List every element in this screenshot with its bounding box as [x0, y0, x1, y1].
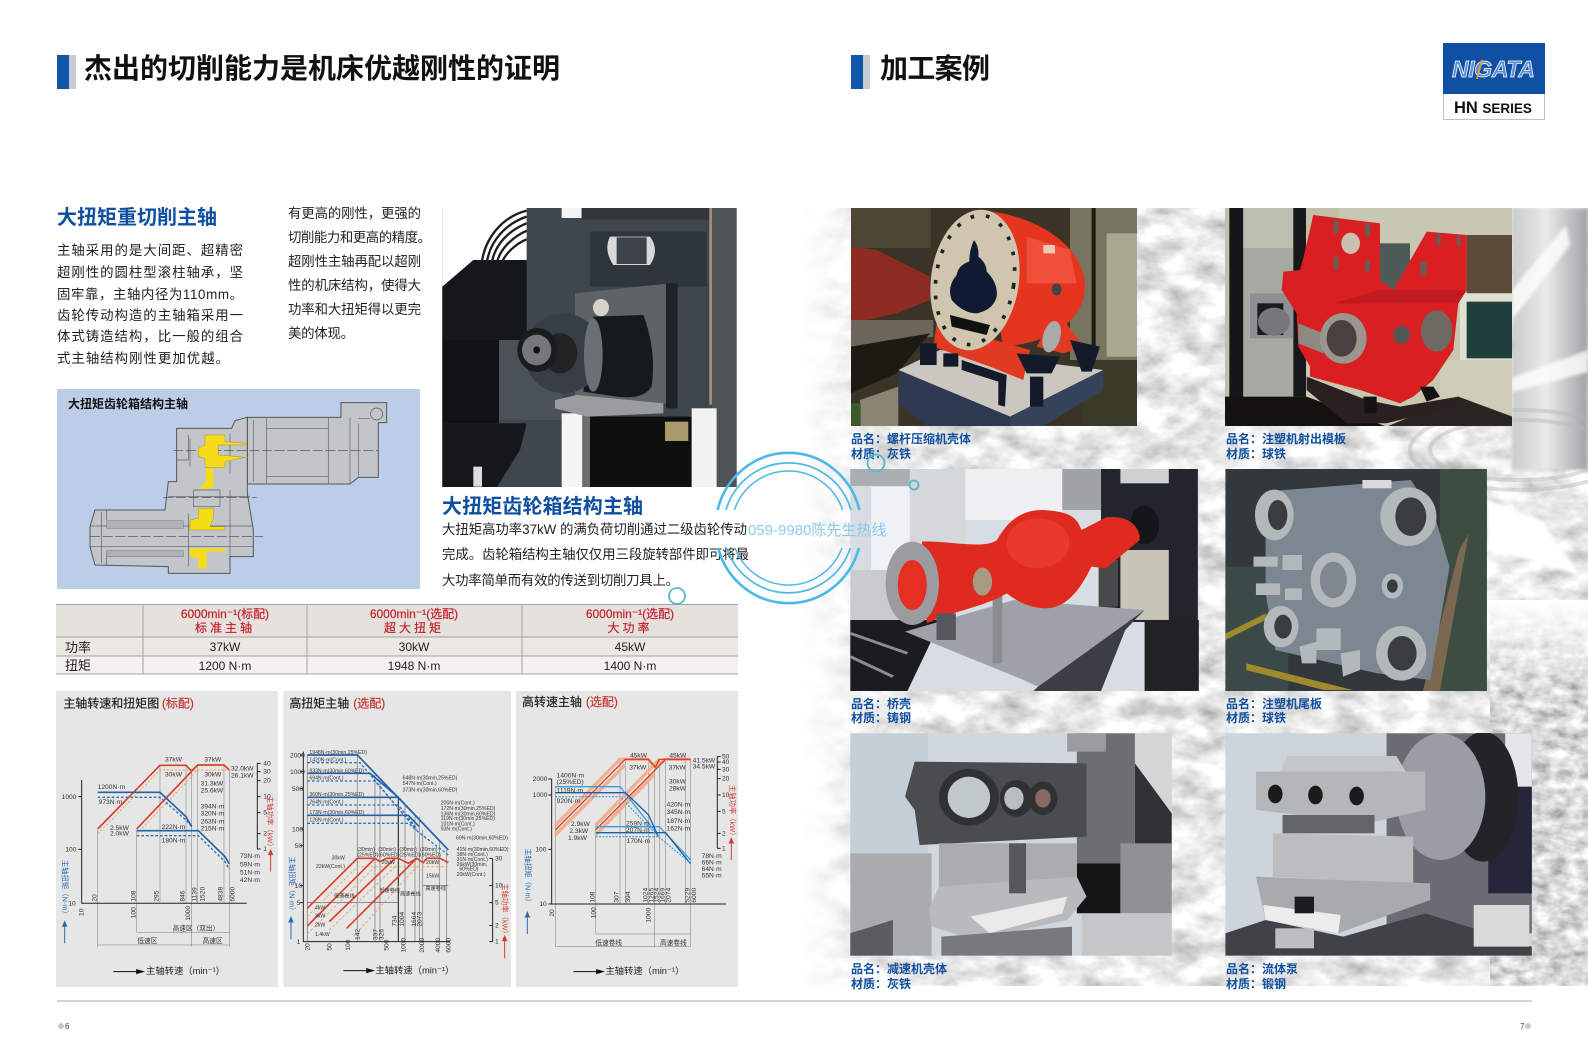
text block: rigidity description: 美的体现。 [288, 326, 354, 341]
text block: gearbox description: 大扭矩高功率37kW 的满负荷切削通过二级齿轮传动 [442, 521, 747, 537]
chart: high torque spindle: 22kW(Cont.) [316, 864, 345, 870]
caption: axle housing: 材质：铸钢 [851, 710, 911, 725]
panel: gearbox spindle cross-section diagram [57, 389, 420, 589]
chart: high speed spindle: 1000 [533, 792, 548, 799]
chart: high speed spindle: 高转速主轴(选配) [522, 694, 618, 709]
chart: high speed spindle: 100 [535, 846, 547, 853]
chart: high speed spindle: 34.5kW [693, 764, 716, 771]
chart: high torque spindle: 119N·m(30min,25%ED) [441, 816, 495, 822]
chart: standard spindle speed and torque: 31.3kW [201, 780, 224, 787]
chart: high torque spindle: 10 [495, 883, 503, 890]
chart: high speed spindle: (25%ED) [557, 779, 584, 786]
chart: standard spindle speed and torque: 20 [91, 894, 98, 902]
chart: high torque spindle: 低速卷线 [334, 891, 355, 899]
chart: high speed spindle: 20 [549, 909, 556, 917]
chart: high speed spindle: 1265 [648, 888, 655, 903]
chart: high speed spindle: 207N·m [626, 827, 650, 834]
chart: standard spindle speed and torque: 37kW [204, 756, 222, 763]
chart: high torque spindle: 20kW [426, 860, 439, 866]
chart: high torque spindle: 15kW [426, 873, 439, 879]
chart: high speed spindle: 2.9kW [571, 821, 591, 828]
page number left [58, 1022, 70, 1031]
chart: high torque spindle: 100 [345, 939, 352, 951]
background: metal splash texture [800, 208, 1588, 986]
chart: high torque spindle: 1000 [290, 769, 305, 776]
caption: axle housing: 品名：桥壳 [851, 696, 911, 711]
chart: standard spindle speed and torque: 51N·m [240, 870, 260, 877]
photo: reducer housing [850, 733, 1172, 956]
chart: high torque spindle: 142 [354, 929, 361, 940]
chart: standard spindle speed and torque: 30kW [204, 772, 222, 779]
caption: reducer housing: 材质：灰铁 [851, 976, 911, 991]
chart: standard spindle speed and torque: 6000 [230, 887, 237, 902]
chart: standard spindle speed and torque: 73N·m [240, 853, 260, 860]
chart: high torque spindle: 26kW(30min, [457, 862, 487, 868]
chart: high torque spindle: 933N·m(30min,60%ED) [309, 768, 364, 774]
caption: injection platen [1226, 431, 1346, 461]
chart: high torque spindle: (30min) [399, 847, 417, 853]
table: spindle comparison: 6000min⁻¹(选配) [586, 607, 674, 621]
text block: spindle description: 齿轮传动构造的主轴箱采用一 [57, 308, 243, 323]
chart: high speed spindle: 2 [722, 830, 726, 837]
chart: high speed spindle: 2074 [665, 888, 672, 903]
chart: high torque spindle: 30kW [332, 855, 345, 861]
chart: standard spindle speed and torque: 100 [65, 847, 77, 854]
chart: high torque spindle: 126N·m(Cont.) [309, 818, 344, 824]
logo: NIIGATA HN SERIES: NIGATA [1452, 56, 1535, 82]
chart: high torque spindle: 2073 [416, 912, 423, 927]
chart: standard spindle speed and torque: 主轴转速（min⁻¹） [146, 965, 225, 976]
text block: spindle description: 体式铸造结构，比一般的组合 [57, 329, 243, 344]
text block: spindle description: 式主轴结构刚性更加优越。 [57, 351, 229, 366]
caption: injection platen: 材质：球铁 [1226, 446, 1286, 461]
chart: standard spindle speed and torque: 1 [263, 846, 267, 853]
caption: injection tail plate: 品名：注塑机尾板 [1226, 696, 1322, 711]
chart: high torque spindle: 2000 [419, 938, 426, 953]
chart: high speed spindle: 1.9kW [568, 835, 588, 842]
chart: high speed spindle: 10 [722, 792, 730, 799]
chart: standard spindle speed and torque: 1520 [200, 887, 207, 902]
table: spindle comparison: 45kW [615, 640, 646, 654]
chart: standard spindle speed and torque: 低速区 [137, 936, 158, 945]
chart: high torque spindle: 5 [297, 900, 301, 907]
chart: standard spindle speed and torque: 108 [130, 890, 137, 902]
text block: gearbox description: 完成。齿轮箱结构主轴仅仅用三段旋转部件即可将最 [442, 547, 749, 562]
chart: standard spindle speed and torque: 32.0kW [231, 766, 254, 773]
chart: standard spindle speed and torque: 20 [263, 778, 271, 785]
chart: high torque spindle: 1 [297, 939, 301, 946]
chart: high torque spindle: 1004 [399, 912, 406, 927]
chart: standard spindle speed and torque: 2.0kW [110, 831, 130, 838]
chart: high speed spindle: 高速卷线 [660, 938, 687, 947]
table: spindle comparison: 1948 N·m [388, 659, 440, 673]
chart: high torque spindle: 1664 [411, 912, 418, 927]
chart: high torque spindle: 4kW [315, 905, 325, 911]
chart: high torque spindle: 264N·m(Cont.) [309, 800, 344, 806]
chart: standard spindle speed and torque: 2.5kW [110, 825, 130, 832]
chart: high speed spindle: 78N·m [702, 853, 722, 860]
chart: high speed spindle: 2.3kW [569, 828, 589, 835]
chart: high torque spindle [283, 691, 511, 987]
caption: screw compressor [851, 431, 971, 461]
chart: high torque spindle: 1000 [400, 938, 407, 953]
chart: high torque spindle: (25%ED) [399, 852, 421, 858]
chart: high torque spindle: 主轴转速（min⁻¹） [375, 964, 454, 975]
table: spindle comparison: 6000min⁻¹(选配) [370, 607, 458, 621]
chart: high speed spindle: 920N·m [557, 798, 581, 805]
chart: high speed spindle: 1 [722, 845, 726, 852]
table: spindle comparison: 1200 N·m [199, 659, 251, 673]
chart: standard spindle speed and torque: 4838 [218, 887, 225, 902]
chart: high torque spindle: 2000 [290, 752, 305, 759]
text block: rigidity description [288, 205, 431, 341]
chart: standard spindle speed and torque: 320N·m [201, 811, 225, 818]
chart: high torque spindle: 136N·m(30min,60%ED) [441, 811, 496, 817]
text block: spindle description [57, 242, 243, 366]
table: spindle comparison: 37kW [210, 640, 241, 654]
chart: high speed spindle: 37kW [669, 764, 686, 771]
table: spindle comparison: 超大扭矩 [384, 620, 444, 635]
caption: fluid pump: 品名：流体泵 [1226, 961, 1298, 976]
chart: high torque spindle: 1 [495, 939, 499, 946]
chart: high speed spindle: 259N·m [626, 820, 650, 827]
page number left: 6 [65, 1022, 70, 1031]
title bar right [851, 55, 870, 89]
chart: high torque spindle: 648N·m(30min,25%ED) [403, 775, 458, 781]
chart: standard spindle speed and torque: 高速区（双出） [173, 923, 219, 932]
caption: fluid pump: 材质：锻钢 [1226, 976, 1286, 991]
text block: rigidity description: 切削能力和更高的精度。 [288, 229, 431, 245]
caption: injection tail plate [1226, 696, 1322, 725]
chart: high torque spindle: 主轴功率（kW） [501, 883, 510, 938]
chart: standard spindle speed and torque: 973N·m [99, 799, 123, 806]
chart: high torque spindle: 6000 [446, 938, 453, 953]
text block: spindle description: 主轴采用的是大间距、超精密 [57, 242, 243, 258]
chart: high speed spindle: 170N·m [627, 838, 651, 845]
chart: high torque spindle: 41N·m(30min,60%ED) [457, 847, 509, 853]
caption: axle housing [851, 696, 911, 725]
chart: high speed spindle: 10 [539, 901, 547, 908]
chart: high torque spindle: (30min) [420, 847, 438, 853]
chart: standard spindle speed and torque: 1000 [62, 794, 77, 801]
chart: high speed spindle: 64N·m [702, 866, 722, 873]
chart: standard spindle speed and torque: 主轴转速和扭矩图(标配) [63, 695, 194, 710]
text block: spindle description: 固牢靠，主轴内径为110mm。 [57, 287, 243, 302]
chart: high torque spindle: 4000 [435, 938, 442, 953]
chart: high torque spindle: 93N·m(Cont.) [441, 826, 472, 832]
chart: standard spindle speed and torque: 37kW [165, 756, 183, 763]
chart: standard spindle speed and torque: 42N·m [240, 877, 260, 884]
table: spindle comparison: 标准主轴 [195, 620, 255, 635]
chart: standard spindle speed and torque: 394N·m [201, 803, 225, 810]
chart: standard spindle speed and torque: 25.6kW [201, 788, 224, 795]
caption: reducer housing: 品名：减速机壳体 [851, 961, 947, 976]
chart: high torque spindle: 20kW(Cont.) [457, 872, 486, 878]
text block: spindle description: 超刚性的圆柱型滚柱轴承，坚 [57, 264, 243, 280]
chart: high torque spindle: 1420N·m(Cont.) [309, 758, 347, 764]
chart: high speed spindle: 1119N·m [557, 787, 584, 794]
panel: gearbox spindle cross-section diagram: 大扭矩齿轮箱结构主轴 [68, 396, 188, 411]
chart: high speed spindle: 55N·m [702, 872, 722, 879]
chart: high torque spindle: 694N·m(Cont.) [309, 776, 344, 782]
chart: high torque spindle: (25%ED) [357, 852, 379, 858]
chart: standard spindle speed and torque: 1139 [192, 887, 199, 902]
caption: reducer housing [851, 961, 947, 991]
chart: high speed spindle: 50 [722, 754, 730, 761]
logo: NIIGATA HN SERIES: HN SERIES [1454, 99, 1532, 117]
chart: high torque spindle: 3kW [315, 913, 325, 919]
chart: standard spindle speed and torque: 30kW [165, 772, 183, 779]
chart: high speed spindle: 45kW [669, 752, 687, 759]
chart: standard spindle speed and torque: 10 [79, 908, 86, 916]
chart: high torque spindle: 1948N·m(30min,25%ED) [309, 750, 367, 756]
chart: standard spindle speed and torque: 1200N·m [98, 784, 125, 791]
page number right: 7 [1520, 1022, 1525, 1031]
chart: high speed spindle: 主轴转速（min⁻¹） [605, 965, 684, 976]
chart: high torque spindle: 101N·m(Cont.) [441, 821, 475, 827]
table: spindle comparison: 功率 [65, 640, 91, 655]
chart: high torque spindle: 172N·m(30min,25%ED) [441, 806, 496, 812]
chart: high torque spindle: 734 [392, 915, 399, 927]
chart: high speed spindle: 394 [625, 891, 632, 903]
chart: high torque spindle: (30min) [378, 847, 396, 853]
chart: high speed spindle: 187N·m [667, 818, 691, 825]
photo: axle housing [850, 469, 1199, 691]
chart: high torque spindle: 高扭矩主轴(选配) [289, 695, 385, 710]
footer rule [57, 1000, 1532, 1002]
chart: high speed spindle: 6000 [691, 888, 698, 903]
chart: standard spindle speed and torque: 主轴扭矩（N·m） [61, 860, 70, 918]
chart: high torque spindle: 主轴扭矩（N·m） [287, 857, 296, 914]
chart: standard spindle speed and torque: 1000 [185, 906, 192, 921]
chart: high speed spindle: 66N·m [702, 860, 722, 867]
chart: high speed spindle: 1400N·m [557, 772, 584, 779]
chart: standard spindle speed and torque: 222N·m [162, 824, 186, 831]
caption: injection platen: 品名：注塑机射出模板 [1226, 431, 1346, 446]
chart: high torque spindle: 1.4kW [315, 932, 330, 938]
table: spindle comparison: 30kW [399, 640, 430, 654]
caption: injection tail plate: 材质：球铁 [1226, 710, 1286, 725]
chart: high speed spindle: 37kW [629, 764, 647, 771]
chart: high speed spindle: 低速卷线 [595, 938, 622, 947]
chart: high speed spindle: 41.5kW [693, 758, 716, 765]
title bar left [57, 55, 76, 89]
chart: high speed spindle: 20 [722, 776, 730, 783]
caption: screw compressor: 品名：螺杆压缩机壳体 [851, 431, 971, 446]
chart: high torque spindle: 31N·m(Cont.) [457, 857, 488, 863]
chart: high speed spindle: 108 [589, 891, 596, 903]
chart: high speed spindle: 1024 [642, 888, 649, 903]
page number right [1520, 1022, 1531, 1031]
chart: standard spindle speed and torque: 30 [263, 769, 271, 776]
chart: high torque spindle: 50 [327, 943, 334, 951]
chart: high speed spindle: 2000 [533, 776, 548, 783]
chart: high torque spindle: 60%ED) [459, 867, 479, 873]
photo: injection molding platen [1225, 208, 1512, 427]
chart: standard spindle speed and torque: 263N·m [201, 818, 225, 825]
chart: high torque spindle: 500 [292, 786, 303, 793]
table: spindle comparison [56, 604, 738, 674]
title: cutting ability: 杰出的切削能力是机床优越刚性的证明 [84, 53, 560, 84]
chart: standard spindle speed and torque: 10 [263, 794, 271, 801]
chart: high torque spindle: 337 [372, 929, 379, 940]
chart: high torque spindle: 2 [495, 923, 499, 930]
text block: rigidity description: 有更高的刚性，更强的 [288, 205, 421, 221]
chart: high torque spindle: 低速卷线 [379, 886, 400, 894]
chart: high torque spindle: 326 [378, 929, 385, 940]
chart: high speed spindle: 100 [590, 907, 597, 918]
text block: rigidity description: 功率和大扭矩得以更完 [288, 301, 421, 317]
chart: standard spindle speed and torque: 100 [130, 907, 137, 918]
chart: standard spindle speed and torque: 846 [180, 890, 187, 902]
chart: standard spindle speed and torque: 180N·m [162, 837, 186, 844]
photo: screw compressor housing [851, 204, 1137, 426]
chart: standard spindle speed and torque: 2 [263, 831, 267, 838]
chart: high speed spindle: 主轴功率（kW） [728, 785, 737, 840]
chart: standard spindle speed and torque: 40 [263, 760, 271, 767]
chart: high torque spindle: 20kW [382, 860, 395, 866]
chart: high speed spindle: 40 [722, 759, 730, 766]
chart: standard spindle speed and torque: 10 [68, 901, 76, 908]
chart: high torque spindle: 69N·m(30min,60%ED) [456, 835, 508, 841]
text block: gearbox description [442, 521, 749, 588]
photo: fluid pump [1225, 732, 1532, 956]
chart: high torque spindle: 50 [295, 843, 302, 850]
heading: high torque heavy cutting spindle: 大扭矩重切削主轴 [57, 206, 217, 229]
table: spindle comparison: 6000min⁻¹(标配) [181, 607, 269, 621]
chart: standard spindle speed and torque: 26.1kW [231, 772, 254, 779]
chart: high speed spindle: 主轴扭矩（N·m） [523, 848, 532, 906]
caption: screw compressor: 材质：灰铁 [851, 446, 911, 461]
chart: high speed spindle: 5229 [684, 888, 691, 903]
chart: high speed spindle: 307 [614, 891, 621, 903]
text block: rigidity description: 性的机床结构，使得大 [288, 277, 421, 293]
chart: high speed spindle: 162N·m [667, 825, 691, 832]
photo: spindle on machine [442, 208, 737, 488]
chart: standard spindle speed and torque: 主轴功率（kW） [265, 796, 274, 851]
chart: high torque spindle: (60%ED) [378, 852, 400, 858]
chart: high torque spindle: 5 [495, 900, 499, 907]
chart: high speed spindle: 1524 [654, 888, 661, 903]
chart: high torque spindle: 100 [292, 826, 303, 833]
chart: high speed spindle: 5 [722, 808, 726, 815]
chart: high speed spindle: 420N·m [667, 801, 691, 808]
chart: standard spindle speed and torque: 高速区 [203, 936, 223, 945]
chart: high torque spindle: 20 [304, 943, 311, 951]
chart: high torque spindle: 38N·m(Cont.) [457, 852, 488, 858]
chart: high torque spindle: 30 [495, 855, 503, 862]
chart: high torque spindle: 高速卷线 [425, 884, 446, 892]
chart: high torque spindle: 2kW [315, 923, 325, 929]
chart: high speed spindle [516, 691, 738, 987]
text block: gearbox description: 大功率简单而有效的传送到切削刀具上。 [442, 572, 679, 588]
chart: high speed spindle: 1669 [659, 888, 666, 903]
chart: standard spindle speed and torque: 295 [154, 890, 161, 902]
chart: high torque spindle: (60%ED) [420, 852, 441, 858]
text block: rigidity description: 超刚性主轴再配以超刚 [288, 254, 421, 269]
chart: high torque spindle: 10 [295, 883, 302, 890]
photo: injection tail plate [1225, 469, 1487, 691]
chart: high torque spindle: 360N·m(30min,25%ED) [309, 792, 364, 798]
chart: high speed spindle: 1000 [646, 908, 653, 923]
chart: standard spindle speed and torque: 59N·m [240, 862, 260, 869]
caption: fluid pump [1226, 961, 1298, 991]
chart: standard spindle speed and torque: 215N·m [201, 825, 225, 832]
chart: high torque spindle: (30min) [357, 847, 375, 853]
watermark: concentric rings and hotline: 059-9980陈先生热线 [748, 521, 886, 539]
chart: high torque spindle: 高速卷线 [400, 889, 421, 897]
logo: NIIGATA HN SERIES [1443, 43, 1545, 120]
chart: high speed spindle: 45kW [630, 752, 648, 759]
chart: high torque spindle: 173N·m(30min,60%ED) [309, 810, 364, 816]
chart: high speed spindle: 345N·m [667, 809, 691, 816]
table: spindle comparison: 1400 N·m [604, 659, 656, 673]
heading: gearbox spindle: 大扭矩齿轮箱结构主轴 [442, 495, 643, 518]
title: machining cases: 加工案例 [880, 53, 990, 84]
chart: high torque spindle: 373N·m(30min,60%ED) [403, 788, 458, 794]
chart: high speed spindle: 30kW [669, 778, 687, 785]
chart: standard spindle speed and torque [56, 691, 278, 987]
chart: standard spindle speed and torque: 5 [263, 810, 267, 817]
table: spindle comparison: 扭矩 [65, 658, 91, 673]
table: spindle comparison: 大功率 [607, 620, 653, 635]
chart: high speed spindle: 30 [722, 766, 730, 773]
chart: high torque spindle: 547N·m(Cont.) [403, 781, 437, 787]
watermark: concentric rings and hotline [669, 453, 918, 604]
chart: high speed spindle: 28kW [669, 786, 687, 793]
chart: high torque spindle: 205N·m(Cont.) [441, 801, 475, 807]
chart: high torque spindle: 500 [384, 939, 391, 951]
